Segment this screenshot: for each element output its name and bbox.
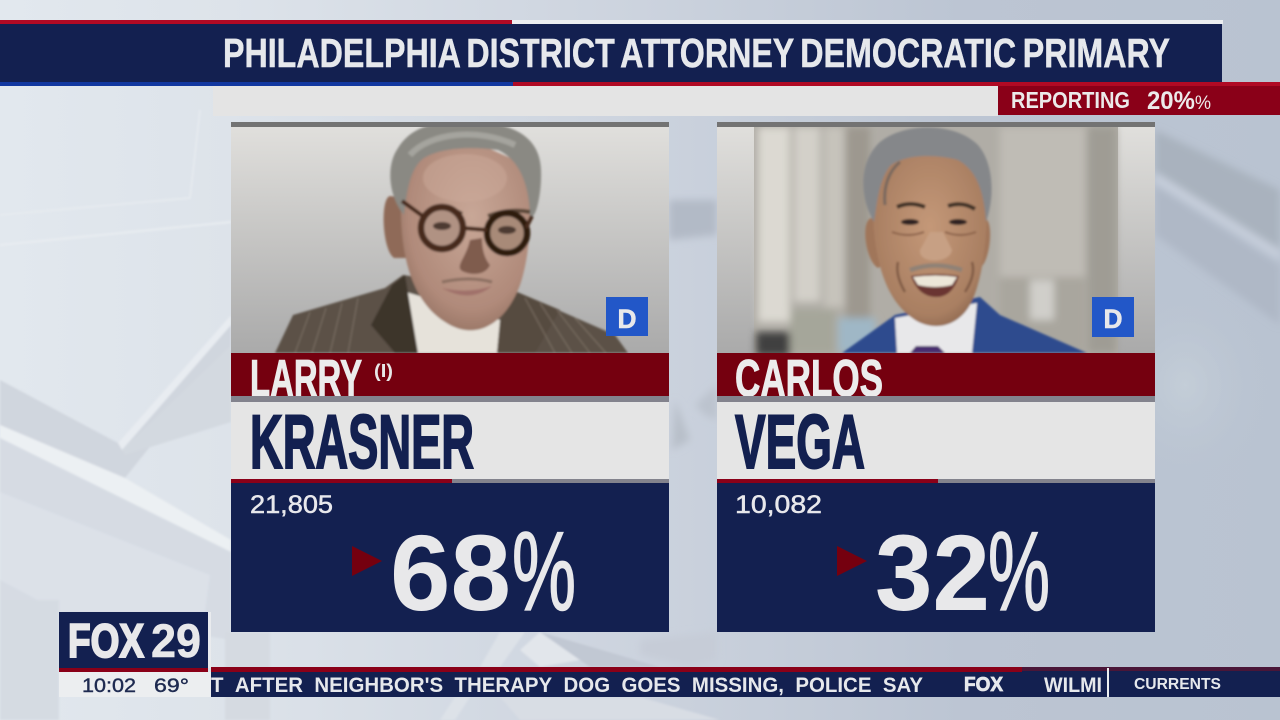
vote count: 21,805: [250, 491, 333, 519]
reporting badge: [998, 86, 1280, 115]
party badge: [606, 297, 648, 336]
arrow: leader marker: [352, 546, 382, 576]
logo number: 29: [151, 614, 201, 667]
name divider: [231, 396, 669, 402]
banner bottom edge: blue and red: [0, 82, 1280, 86]
panel top rule: [717, 122, 1155, 127]
vote share bar: [717, 479, 1155, 483]
vote percentage: 68: [390, 512, 511, 633]
results box: [231, 483, 669, 632]
last name: VEGA: [735, 400, 865, 485]
logo red rule: [59, 668, 208, 672]
clock and temperature box: [59, 672, 211, 697]
light strip under banner: [213, 86, 998, 116]
first name: CARLOS: [735, 350, 883, 408]
vote percentage: [390, 509, 576, 634]
ticker next headline: WILMI: [1044, 674, 1102, 697]
vote count: 10,082: [735, 491, 822, 519]
ticker headline: T AFTER NEIGHBOR'S THERAPY DOG GOES MISSING, POLICE SAY: [211, 674, 923, 697]
panel: Carlos Vega: [717, 122, 1155, 634]
party badge: [1092, 297, 1134, 337]
panel top rule: [231, 122, 669, 127]
logo background: [59, 612, 208, 668]
vote percentage: %: [512, 509, 576, 634]
vote share bar: [231, 479, 669, 483]
last name band: [231, 402, 669, 479]
candidate photo: Vega: [717, 127, 1155, 356]
results box: [717, 483, 1155, 632]
ticker divider: [1107, 668, 1109, 697]
clock: 10:02: [82, 676, 136, 697]
arrow: trailing marker: [837, 546, 867, 576]
vote percentage: 32: [875, 512, 990, 633]
ticker section label: CURRENTS: [1134, 676, 1221, 693]
reporting label: REPORTING: [1011, 87, 1130, 113]
banner top edge: red and white: [0, 20, 1223, 24]
logo text: FOX: [68, 614, 144, 667]
news ticker: [211, 667, 1280, 697]
soft glow: [1095, 275, 1275, 495]
station logo: FOX 29: [59, 612, 211, 697]
ticker top rule: [211, 667, 1280, 672]
first name band: [717, 353, 1155, 396]
temperature: 69°: [154, 676, 189, 697]
party badge: D: [1104, 304, 1122, 334]
panel: Larry Krasner: [231, 122, 669, 634]
ticker separator logo: FOX: [964, 674, 1004, 696]
reporting value: 20%%: [1147, 87, 1211, 115]
candidate photo: Krasner: [231, 122, 669, 353]
last name band: [717, 402, 1155, 479]
vote percentage: [875, 509, 1050, 634]
first name: LARRY: [250, 350, 362, 408]
party badge: D: [618, 304, 636, 334]
last name: KRASNER: [250, 400, 474, 485]
name divider: [717, 396, 1155, 402]
banner navy bar: [0, 24, 1222, 82]
vote percentage: %: [988, 509, 1050, 634]
top banner: [0, 20, 1280, 86]
logo right edge: [208, 612, 211, 668]
ticker bar: [211, 667, 1280, 697]
first name band: [231, 353, 669, 396]
incumbent mark: (I): [374, 361, 393, 381]
